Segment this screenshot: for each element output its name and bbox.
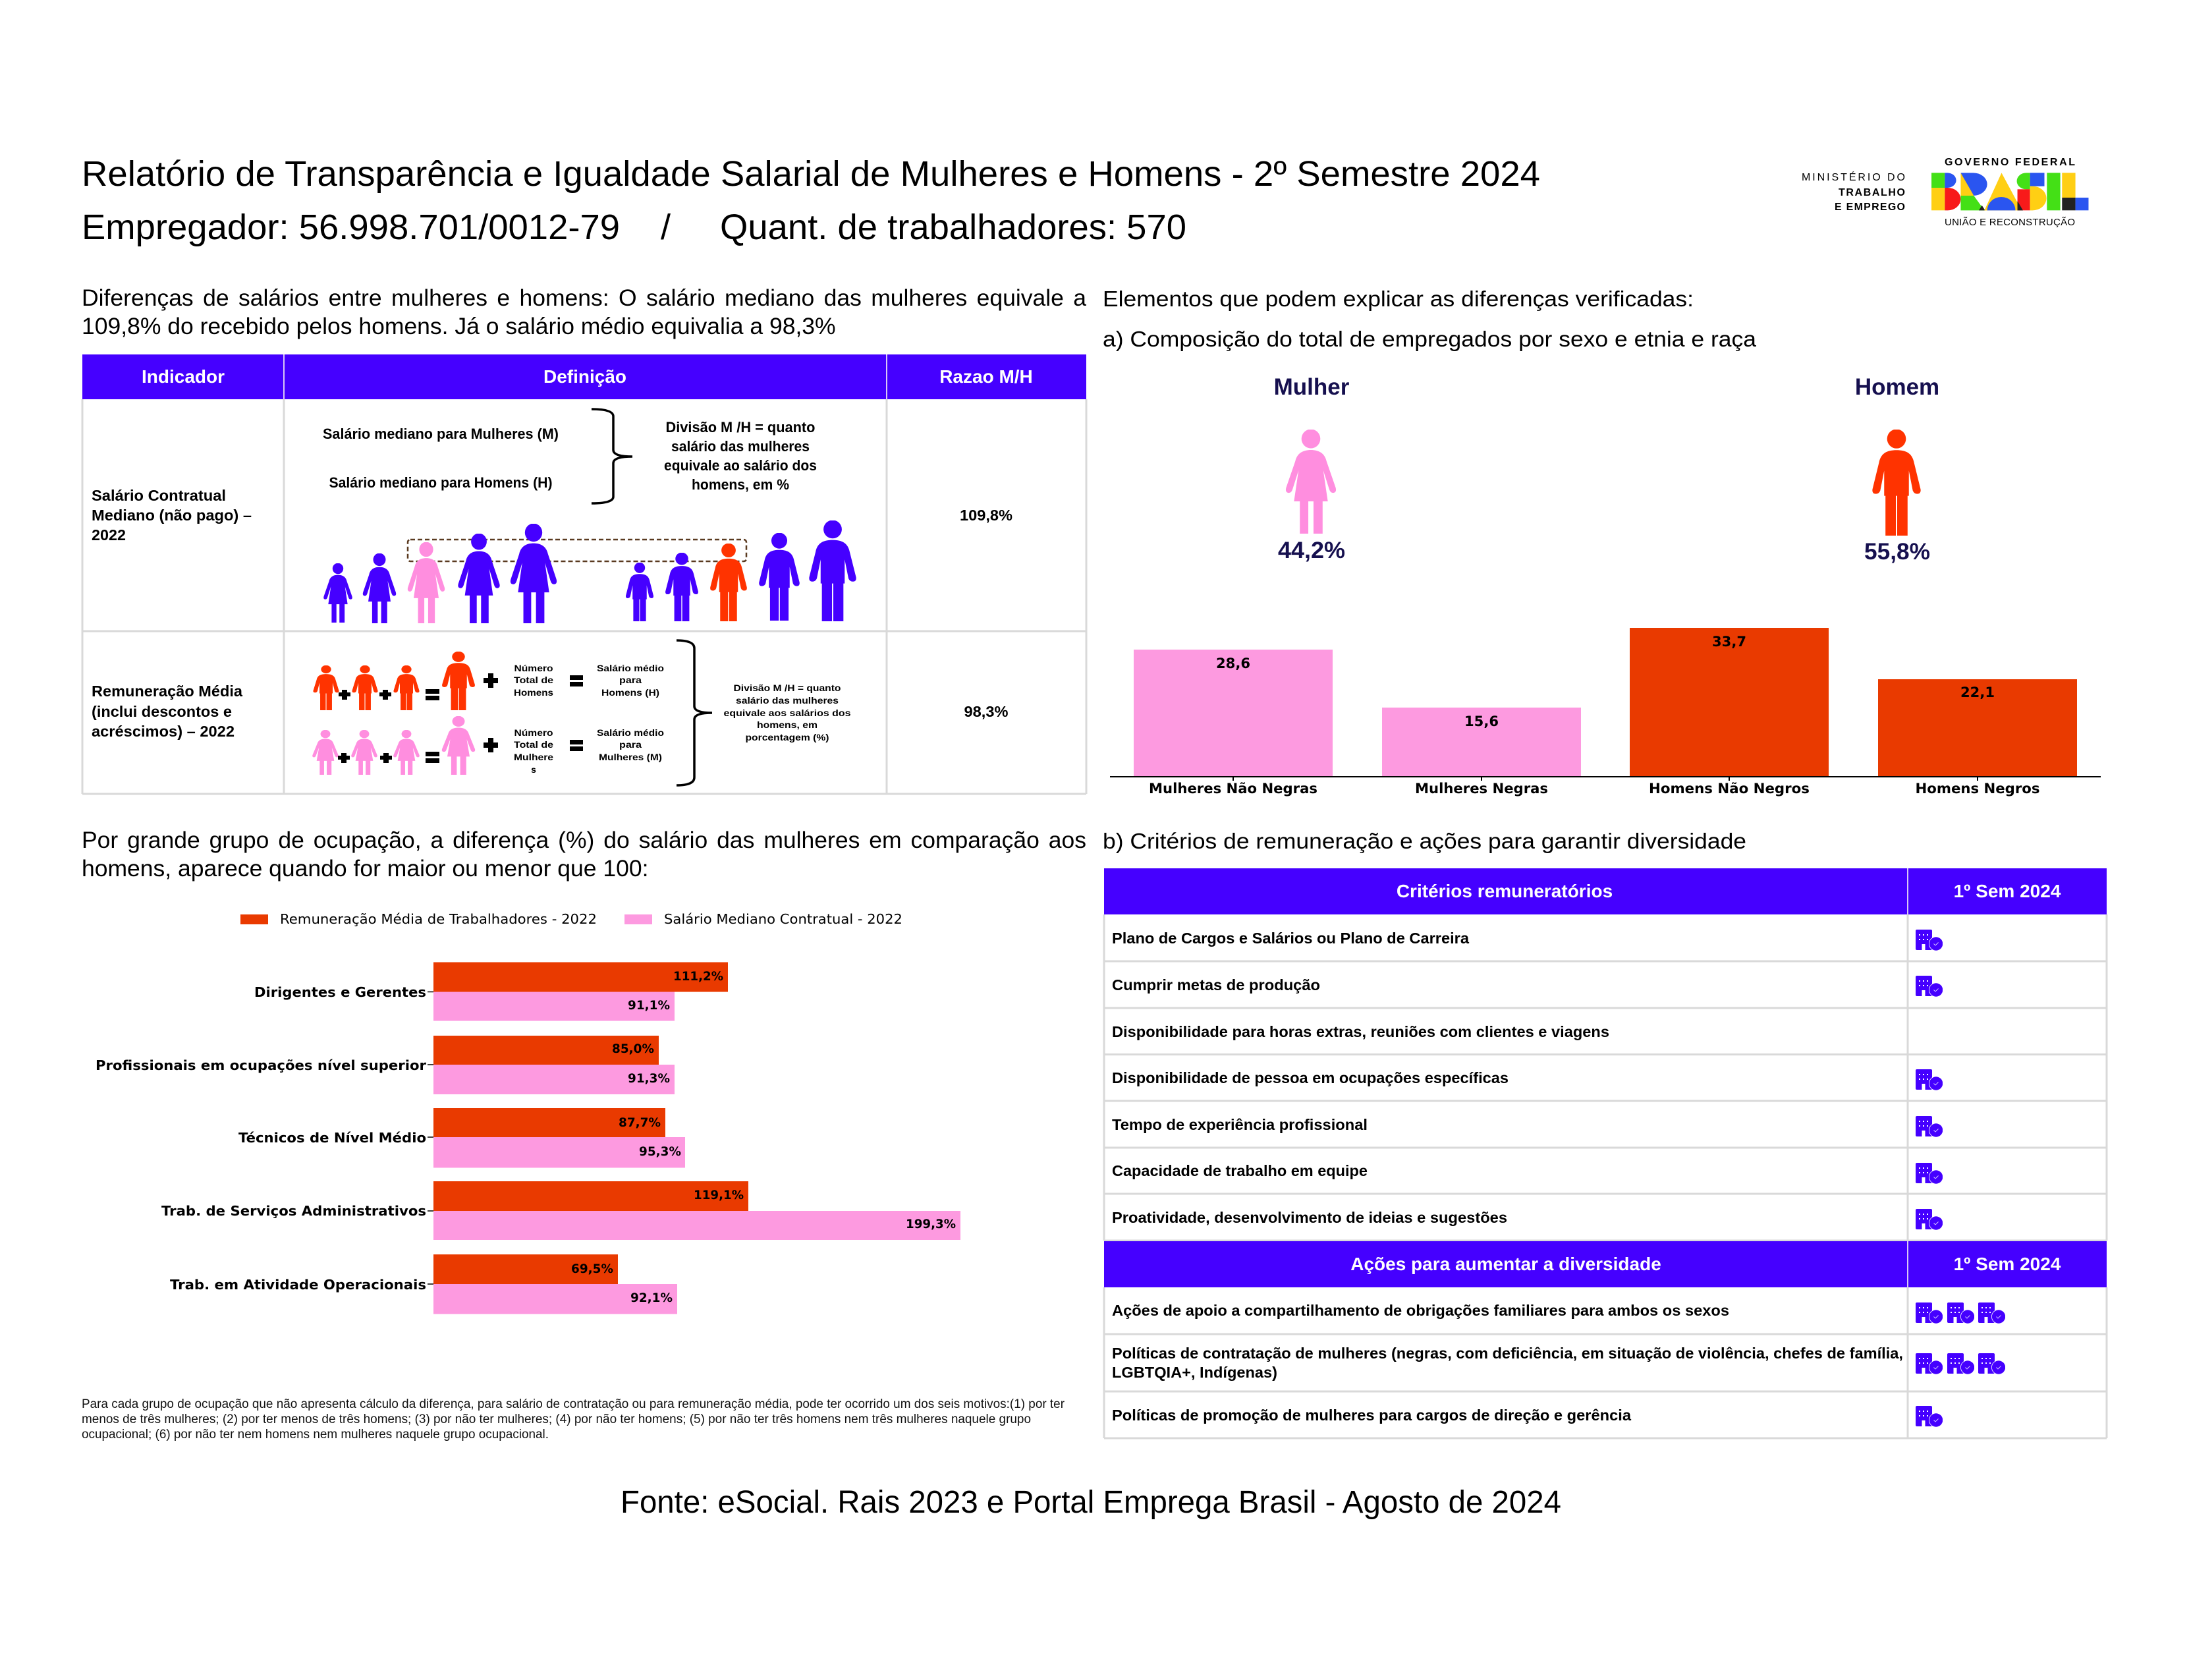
legend: Salário Mediano Contratual - 2022 (664, 911, 902, 927)
average division text: Divisão M /H = quanto (734, 683, 841, 693)
row 1 indicator label (92, 487, 252, 544)
text block: occupational groups intro: homens, aparece quando for maior ou menor que 100: (82, 855, 648, 882)
footnote: Para cada grupo de ocupação que não apresenta cálculo da diferença, para salário de contratação ou para remuneração média, pode ter ocorrido um dos seis motivos:(1) por ter (82, 1397, 1065, 1411)
header: remuneration criteria (1104, 868, 2107, 914)
table grid (82, 399, 1086, 794)
bar chart: sex and race: 28,6 (1216, 656, 1250, 671)
women average text: Mulheres (M) (599, 752, 662, 762)
average division text: homens, em (757, 719, 817, 730)
criteria rows: Disponibilidade de pessoa em ocupações específicas (1112, 1069, 1509, 1086)
text block: occupational groups intro (82, 827, 1086, 882)
government wordmark: GOVERNO FEDERAL (1945, 157, 2075, 168)
men average text: para (619, 675, 642, 685)
footnote: ocupacional; (6) por não ter nem homens nem mulheres naquele grupo ocupacional. (82, 1428, 549, 1442)
table grid (1104, 914, 2107, 1438)
source line: Fonte: eSocial. Rais 2023 e Portal Emprega Brasil - Agosto de 2024 (621, 1485, 1561, 1520)
Brasil coloured shapes (1931, 173, 2088, 210)
table header: Definição (543, 366, 626, 387)
category labels (96, 984, 426, 1293)
criteria icons (1916, 930, 1943, 1231)
table header (82, 354, 1086, 399)
women average text: Total de (514, 739, 553, 750)
bar chart: sex and race: Mulheres Não Negras (1149, 781, 1317, 797)
row 2 indicator label (92, 683, 242, 740)
legend: Remuneração Média de Trabalhadores - 2022 (280, 911, 597, 927)
heading b: b) Critérios de remuneração e ações para garantir diversidade (1103, 829, 1746, 853)
median division text: salário das mulheres (671, 438, 810, 455)
median division text (664, 419, 817, 493)
bar chart: sex and race: Homens Negros (1916, 781, 2039, 797)
row 1 indicator label: Mediano (não pago) – (92, 507, 252, 524)
legend (240, 911, 902, 927)
text block: salary differences (82, 285, 1086, 339)
slogan: UNIÃO E RECONSTRUÇÃO (1945, 217, 2075, 228)
bar chart: sex and race: 15,6 (1464, 714, 1499, 729)
icons: women average formula (312, 716, 583, 775)
header: diversity actions: Ações para aumentar a diversidade (1350, 1254, 1661, 1274)
bars (428, 962, 960, 1314)
average division text: salário das mulheres (736, 695, 839, 706)
category labels: Trab. de Serviços Administrativos (161, 1203, 426, 1219)
women average text: Número (514, 727, 553, 738)
median dashed highlight (408, 540, 746, 561)
row 1 indicator label: 2022 (92, 526, 126, 544)
brace: average (677, 640, 712, 785)
diversity rows: LGBTQIA+, Indígenas) (1112, 1364, 1277, 1381)
men average text (514, 663, 664, 698)
bar chart: sex and race: Mulheres Negras (1415, 781, 1548, 797)
men average text: Número (514, 663, 553, 673)
subtitle: separator: / (661, 208, 671, 247)
row 2 indicator label: (inclui descontos e (92, 703, 232, 720)
average division text: porcentagem (%) (746, 732, 829, 742)
value labels: 91,1% (628, 998, 670, 1013)
bar chart: sex and race: 33,7 (1712, 634, 1746, 650)
brace: median (592, 409, 632, 503)
women average text (514, 727, 664, 775)
median division text: Divisão M /H = quanto (665, 419, 816, 435)
header: remuneration criteria: 1º Sem 2024 (1954, 881, 2061, 901)
row 1 ratio: 109,8% (960, 507, 1012, 524)
panel: remuneration and diversity table (1104, 868, 2107, 1438)
women share: Mulher (1274, 374, 1350, 400)
diversity rows: Ações de apoio a compartilhamento de obrigações familiares para ambos os sexos (1112, 1302, 1729, 1319)
bar chart: sex and race: Homens Não Negros (1649, 781, 1810, 797)
diversity rows: Políticas de promoção de mulheres para cargos de direção e gerência (1112, 1407, 1631, 1424)
median division text: homens, em % (692, 476, 789, 493)
women average text: s (531, 764, 536, 775)
text block: occupational groups intro: Por grande grupo de ocupação, a diferença (%) do salário das mulheres em comparação aos (82, 827, 1086, 853)
men average text: Homens (514, 687, 553, 698)
logo: ministry and federal government (1802, 157, 2088, 228)
horizontal bar chart: occupational groups (96, 911, 960, 1314)
category labels: Dirigentes e Gerentes (254, 984, 426, 1000)
row 2 ratio: 98,3% (964, 703, 1008, 720)
title (82, 154, 1540, 247)
panel: indicator table (82, 354, 1086, 794)
table header: Razao M/H (939, 366, 1033, 387)
value labels: 85,0% (612, 1042, 654, 1056)
table header: Indicador (142, 366, 225, 387)
footnote (82, 1397, 1065, 1442)
women average text: Mulhere (514, 752, 553, 762)
women share (1274, 374, 1350, 563)
criteria rows: Capacidade de trabalho em equipe (1112, 1162, 1368, 1179)
average division text: equivale aos salários dos (723, 708, 851, 718)
value labels: 69,5% (571, 1262, 613, 1276)
footnote: menos de três mulheres; (2) por ter menos de três homens; (3) por não ter mulheres; (4) por não ter homens; (5) por não ter três homens nem três mulheres naquele grupo (82, 1413, 1031, 1426)
subtitle: employer: Empregador: 56.998.701/0012-79 (82, 208, 620, 247)
row 1 indicator label: Salário Contratual (92, 487, 226, 504)
ministry wordmark (1802, 171, 1905, 213)
text block: salary differences: 109,8% do recebido pelos homens. Já o salário médio equivalia a 98,3% (82, 313, 836, 339)
criteria rows (1112, 930, 1609, 1226)
men share: Homem (1855, 374, 1939, 400)
icons: men by pay (626, 520, 856, 621)
heading: explanatory elements: Elementos que podem explicar as diferenças verificadas: (1103, 287, 1694, 311)
diversity rows: Políticas de contratação de mulheres (negras, com deficiência, em situação de violência, chefes de família, (1112, 1345, 1903, 1362)
criteria rows: Proatividade, desenvolvimento de ideias e sugestões (1112, 1209, 1507, 1226)
criteria rows: Tempo de experiência profissional (1112, 1116, 1368, 1133)
value labels: 95,3% (639, 1144, 681, 1159)
icons: women by pay (323, 524, 557, 623)
category labels: Técnicos de Nível Médio (238, 1130, 426, 1146)
category labels: Trab. em Atividade Operacionais (170, 1277, 426, 1293)
women share: 44,2% (1278, 538, 1345, 563)
value labels: 91,3% (628, 1071, 670, 1086)
header: diversity actions: 1º Sem 2024 (1954, 1254, 2061, 1274)
header: remuneration criteria: Critérios remuneratórios (1397, 881, 1613, 901)
icons: men average formula (313, 652, 583, 710)
diversity icons (1916, 1302, 2006, 1427)
subtitle: headcount: Quant. de trabalhadores: 570 (720, 208, 1186, 247)
median division text: equivale ao salário dos (664, 457, 817, 474)
panel: workforce composition (1110, 374, 2101, 797)
bar chart: sex and race (1110, 628, 2101, 797)
row 2 indicator label: acréscimos) – 2022 (92, 723, 235, 740)
header: diversity actions (1104, 1241, 2107, 1287)
value labels: 199,3% (906, 1217, 956, 1231)
diversity rows (1112, 1302, 1903, 1424)
value labels: 111,2% (673, 969, 723, 984)
heading: explanatory elements (1103, 287, 1757, 351)
median definition labels: Salário mediano para Homens (H) (329, 474, 552, 491)
title: Relatório de Transparência e Igualdade Salarial de Mulheres e Homens - 2º Semestre 2024 (82, 154, 1540, 194)
median definition labels: Salário mediano para Mulheres (M) (323, 426, 559, 442)
average division text (723, 683, 851, 742)
women average text: para (619, 739, 642, 750)
bar chart: sex and race: 22,1 (1960, 685, 1995, 700)
value labels: 87,7% (619, 1115, 661, 1130)
ministry wordmark: TRABALHO (1839, 187, 1905, 198)
criteria rows: Disponibilidade para horas extras, reuniões com clientes e viagens (1112, 1023, 1609, 1040)
men share: 55,8% (1864, 539, 1930, 565)
row 2 indicator label: Remuneração Média (92, 683, 242, 700)
text block: salary differences: Diferenças de salários entre mulheres e homens: O salário mediano das mulheres equivale a (82, 285, 1086, 311)
criteria rows: Cumprir metas de produção (1112, 976, 1320, 994)
ministry wordmark: E EMPREGO (1835, 202, 1905, 213)
men average text: Homens (H) (601, 687, 659, 698)
men average text: Total de (514, 675, 553, 685)
women average text: Salário médio (597, 727, 664, 738)
heading a: a) Composição do total de empregados por sexo e etnia e raça (1103, 327, 1757, 351)
category labels: Profissionais em ocupações nível superior (96, 1057, 426, 1073)
value labels: 119,1% (694, 1188, 744, 1202)
value labels (571, 969, 956, 1305)
value labels: 92,1% (630, 1291, 673, 1305)
men share (1855, 374, 1939, 565)
men average text: Salário médio (597, 663, 664, 673)
criteria rows: Plano de Cargos e Salários ou Plano de Carreira (1112, 930, 1469, 947)
ministry wordmark: MINISTÉRIO DO (1802, 171, 1905, 183)
median definition labels (323, 426, 559, 491)
